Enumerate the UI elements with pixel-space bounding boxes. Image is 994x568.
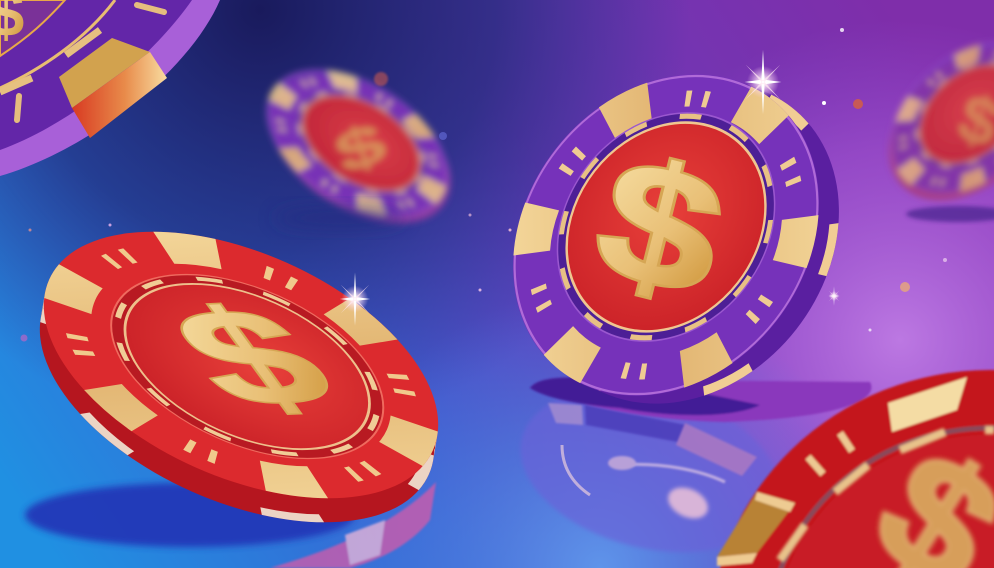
red chip face	[0, 153, 510, 568]
ambient particles	[20, 28, 947, 342]
top left chip ring dashes	[0, 30, 100, 92]
top left chip inner disc	[0, 0, 65, 56]
reflection: red chip	[270, 482, 436, 568]
bottom right chip gold block left	[717, 492, 795, 557]
bottom right chip inner ring	[768, 428, 994, 568]
top left chip ticks	[17, 5, 164, 120]
chip: top left, cropped	[0, 0, 220, 176]
sparkle: right	[828, 286, 840, 306]
blurred chip: top right	[847, 0, 994, 238]
purple chip face	[421, 0, 911, 486]
sparkle: purple chip top	[745, 50, 781, 114]
chip: bottom right, cropped	[710, 370, 994, 568]
top left chip face	[0, 0, 192, 150]
bottom right chip inner disc	[775, 435, 994, 568]
reflection: purple chip	[503, 362, 797, 568]
top left chip rim	[0, 0, 220, 176]
dollar sign: red chip: $	[141, 280, 364, 434]
shadow: top right chip	[906, 206, 994, 222]
blurred chip: top middle	[225, 26, 489, 260]
shadow: top middle chip	[274, 208, 406, 228]
top left chip gold block	[59, 38, 150, 108]
bottom right chip ticks	[808, 433, 852, 474]
shadow: purple chip	[530, 377, 871, 422]
dollar sign: purple chip: $	[580, 120, 740, 333]
bottom right chip gold block top	[888, 377, 967, 432]
bottom right chip ring dashes	[780, 430, 994, 560]
blurred chip: top middle: $	[327, 110, 394, 186]
top left chip gold block side	[72, 52, 167, 138]
shadow: red chip	[25, 483, 355, 547]
top left chip ring	[0, 0, 115, 88]
red chip edge	[0, 183, 477, 568]
sparkle: red chip	[340, 272, 370, 326]
purple chip edge	[455, 15, 902, 465]
bottom right chip body	[710, 370, 994, 568]
